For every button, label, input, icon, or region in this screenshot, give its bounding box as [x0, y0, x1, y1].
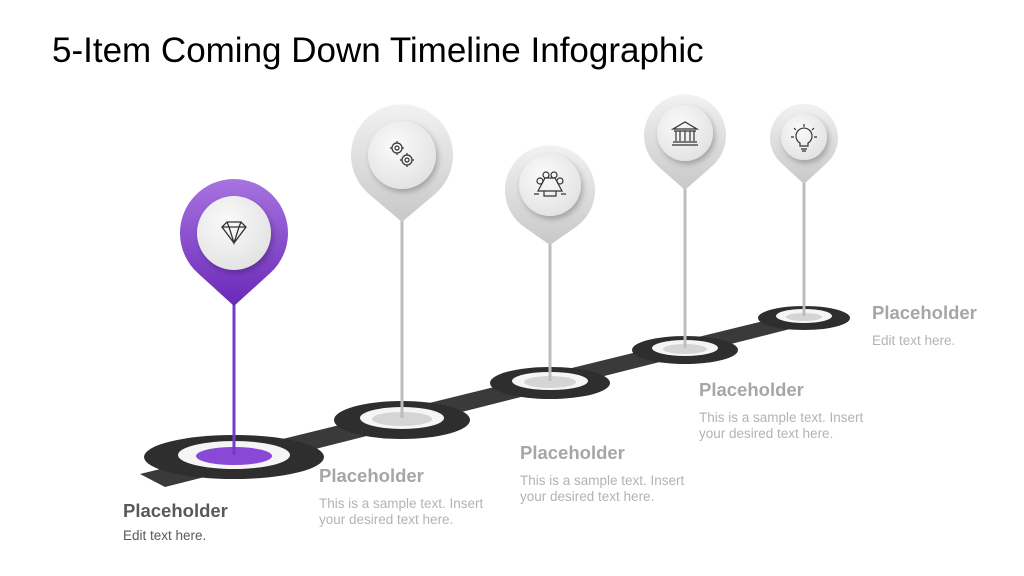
icon: diamond — [222, 222, 246, 243]
text: item 2: Placeholder — [319, 465, 424, 486]
stop 4 — [632, 94, 738, 364]
title: 5-Item Coming Down Timeline Infographic — [52, 31, 704, 70]
text: item 5 — [872, 302, 977, 348]
text: item 1: Placeholder — [123, 500, 228, 521]
icon: bulb — [791, 124, 817, 151]
text: item 4 — [699, 379, 864, 441]
road — [140, 312, 802, 487]
icon: bank — [672, 122, 698, 145]
text: item 4: your desired text here. — [699, 426, 833, 441]
stop 5 — [758, 104, 850, 330]
text: item 1: Edit text here. — [123, 528, 206, 543]
text: item 3 — [520, 442, 684, 504]
stop 2 — [334, 104, 470, 439]
text: item 1 — [123, 500, 228, 543]
text: item 2 — [319, 465, 484, 527]
text: item 5: Edit text here. — [872, 333, 955, 348]
icon: gears — [390, 141, 414, 167]
text: item 3: Placeholder — [520, 442, 625, 463]
text: item 4: This is a sample text. Insert — [699, 410, 863, 425]
icon: meeting table — [534, 172, 566, 196]
text: item 3: This is a sample text. Insert — [520, 473, 684, 488]
stop 1 — [144, 179, 324, 479]
text: item 4: Placeholder — [699, 379, 804, 400]
text: item 2: This is a sample text. Insert — [319, 496, 483, 511]
text: item 2: your desired text here. — [319, 512, 453, 527]
stop 3 — [490, 145, 610, 399]
text: item 5: Placeholder — [872, 302, 977, 323]
text: item 3: your desired text here. — [520, 489, 654, 504]
